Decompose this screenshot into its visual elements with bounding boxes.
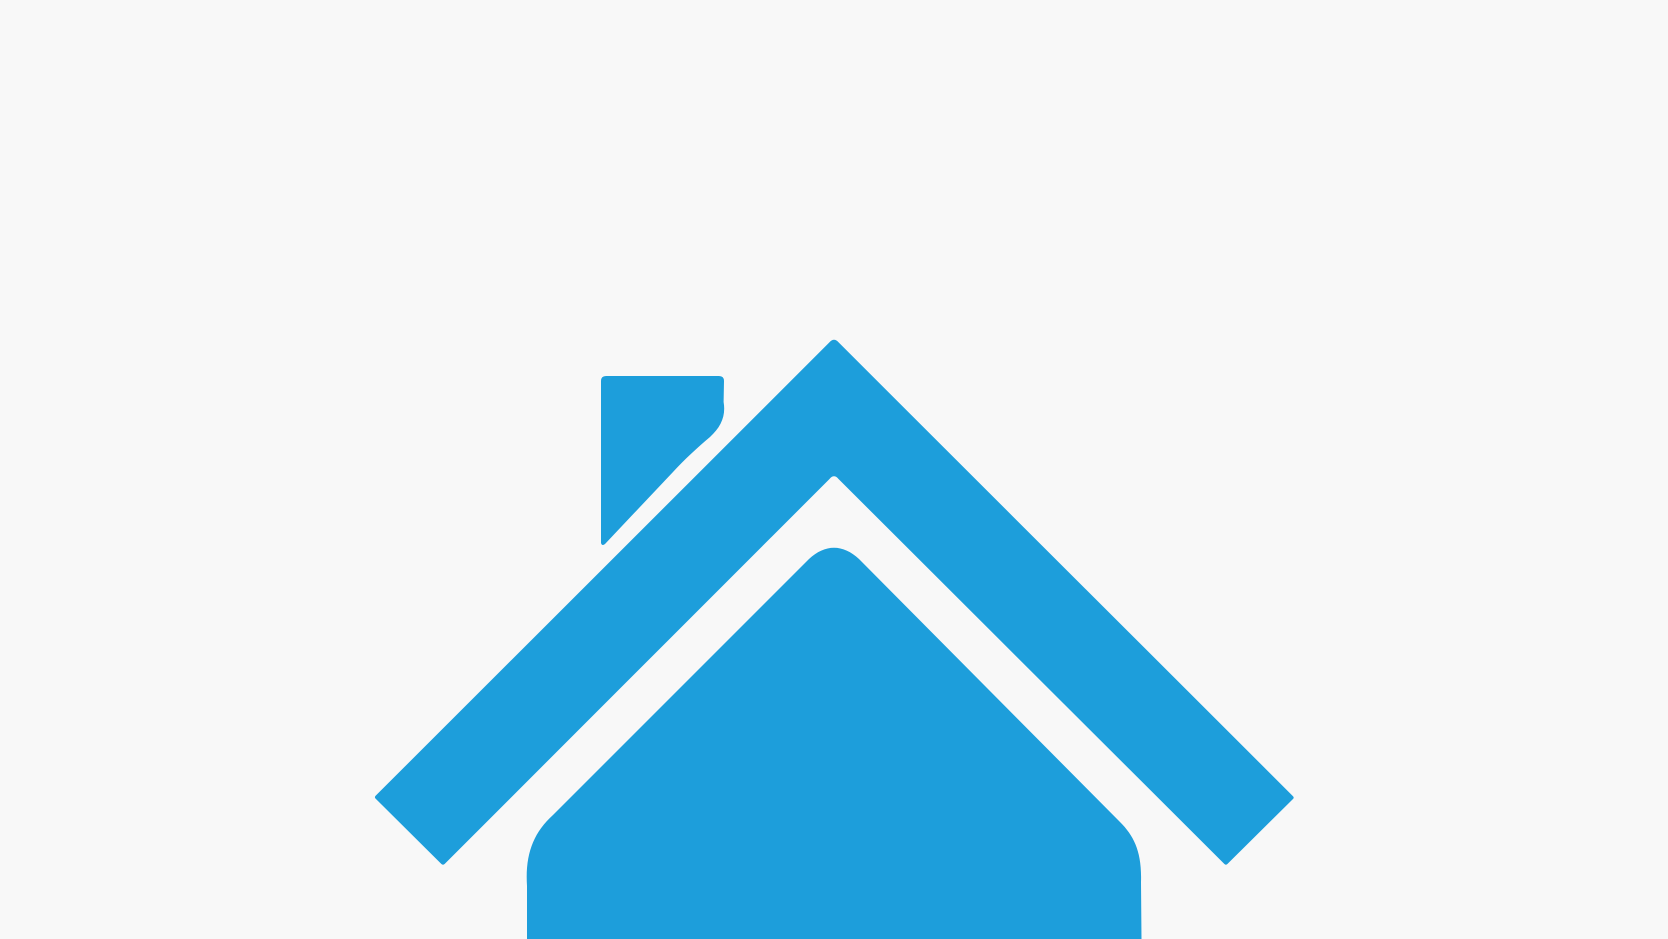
icon: chimney (601, 376, 724, 545)
icon: house body (527, 548, 1142, 939)
icon: roof (375, 340, 1294, 865)
